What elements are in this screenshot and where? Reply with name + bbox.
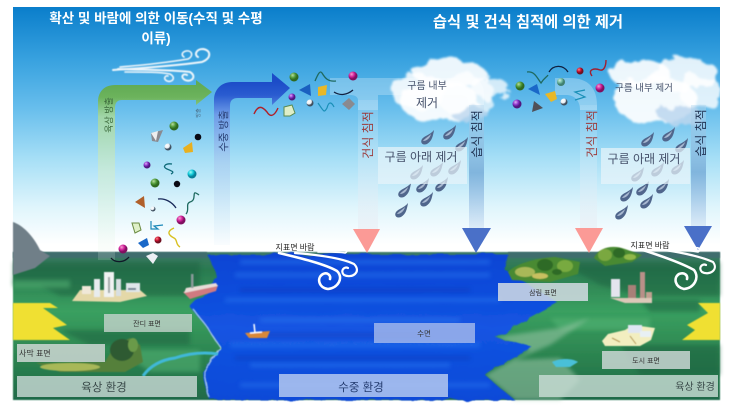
title left: 확산 및 바람에 의한 이동(수직 및 수평 [49,10,263,26]
title left: 이류) [141,31,171,46]
rain drops right [615,127,688,220]
label: land environment left: 육상 환경 [81,380,127,394]
label: land environment right [539,375,718,397]
label: wet deposition 2: 습식 침적 [694,109,708,157]
icon: factory [72,272,147,302]
title left [49,10,263,46]
label: forest surface: 삼림 표면 [529,288,557,297]
label: wet deposition 1: 습식 침적 [470,110,484,158]
icon: town [602,325,655,346]
label: in-cloud removal left: 구름 내부 [407,80,447,92]
label: grass surface: 잔디 표면 [133,319,161,328]
arrow: dry deposition 1 [353,229,380,253]
icon: desert right [682,303,720,340]
river [143,353,218,376]
icon: city [610,272,652,303]
rain drops left [395,125,468,218]
deposition columns [358,100,706,229]
sandy coast right [485,318,590,400]
particles: middle group [254,72,358,116]
label: surface wind left: 지표면 바람 [275,242,315,252]
label: grass surface [104,314,192,332]
label: small emission: 방출 [195,108,202,118]
label: land environment right: 육상 환경 [675,380,715,393]
arrow: wet deposition 1 [462,228,491,253]
box: below cloud left [378,147,467,184]
icon: forest center right [508,257,580,282]
label: in-cloud removal left [407,80,447,110]
sky background [13,7,720,257]
label: surface wind right: 지표면 바람 [630,240,670,250]
sea [190,254,558,400]
box: below cloud left: 구름 아래 제거 [385,150,457,164]
box: below cloud right [601,148,690,184]
label: land environment left [17,376,197,397]
mountain [13,222,50,275]
label: urban surface [602,351,690,369]
icon: pond [552,359,578,367]
arrow: wet deposition 2 [684,226,712,250]
cloud right [610,58,722,124]
arrow: water emission [214,73,290,245]
icon: surface wind left [279,249,357,289]
cloud left [390,59,508,122]
label: dry deposition 2: 건식 침적 [585,110,599,158]
label: desert surface [17,344,105,362]
icon: forest far right [594,247,642,266]
icon: small boat [245,324,270,338]
label: desert surface: 사막 표면 [19,348,51,358]
label: land emission: 육상 방출 [104,97,114,133]
label: dry deposition 1: 건식 침적 [361,111,375,159]
label: in-cloud removal left: 제거 [416,96,438,110]
label: forest surface [498,283,588,301]
land and sea ground [13,252,720,400]
label: water emission: 수중 방출 [218,110,230,152]
particles: left column [111,122,201,264]
label: in-cloud removal right: 구름 내부 제거 [615,83,673,94]
arrow: land emission [98,80,212,260]
icon: forest desert [36,338,143,372]
particles: right group [512,60,606,112]
white surf left [193,309,220,398]
label: water surface: 수면 [417,328,431,338]
icon: left ship [183,274,218,299]
icon: upper wind [113,49,209,81]
label: water surface [374,323,475,343]
arrow: dry deposition 2 [575,228,603,253]
label: urban surface: 도시 표면 [632,356,660,365]
title right: 습식 및 건식 침적에 의한 제거 [433,14,623,31]
band: second deposition [555,78,597,110]
box: below cloud right: 구름 아래 제거 [608,152,680,166]
icon: surface wind right [637,248,715,289]
icon: desert left [13,303,70,340]
label: water environment [279,374,448,397]
band: first deposition [330,78,484,110]
label: water environment: 수중 환경 [338,380,384,394]
